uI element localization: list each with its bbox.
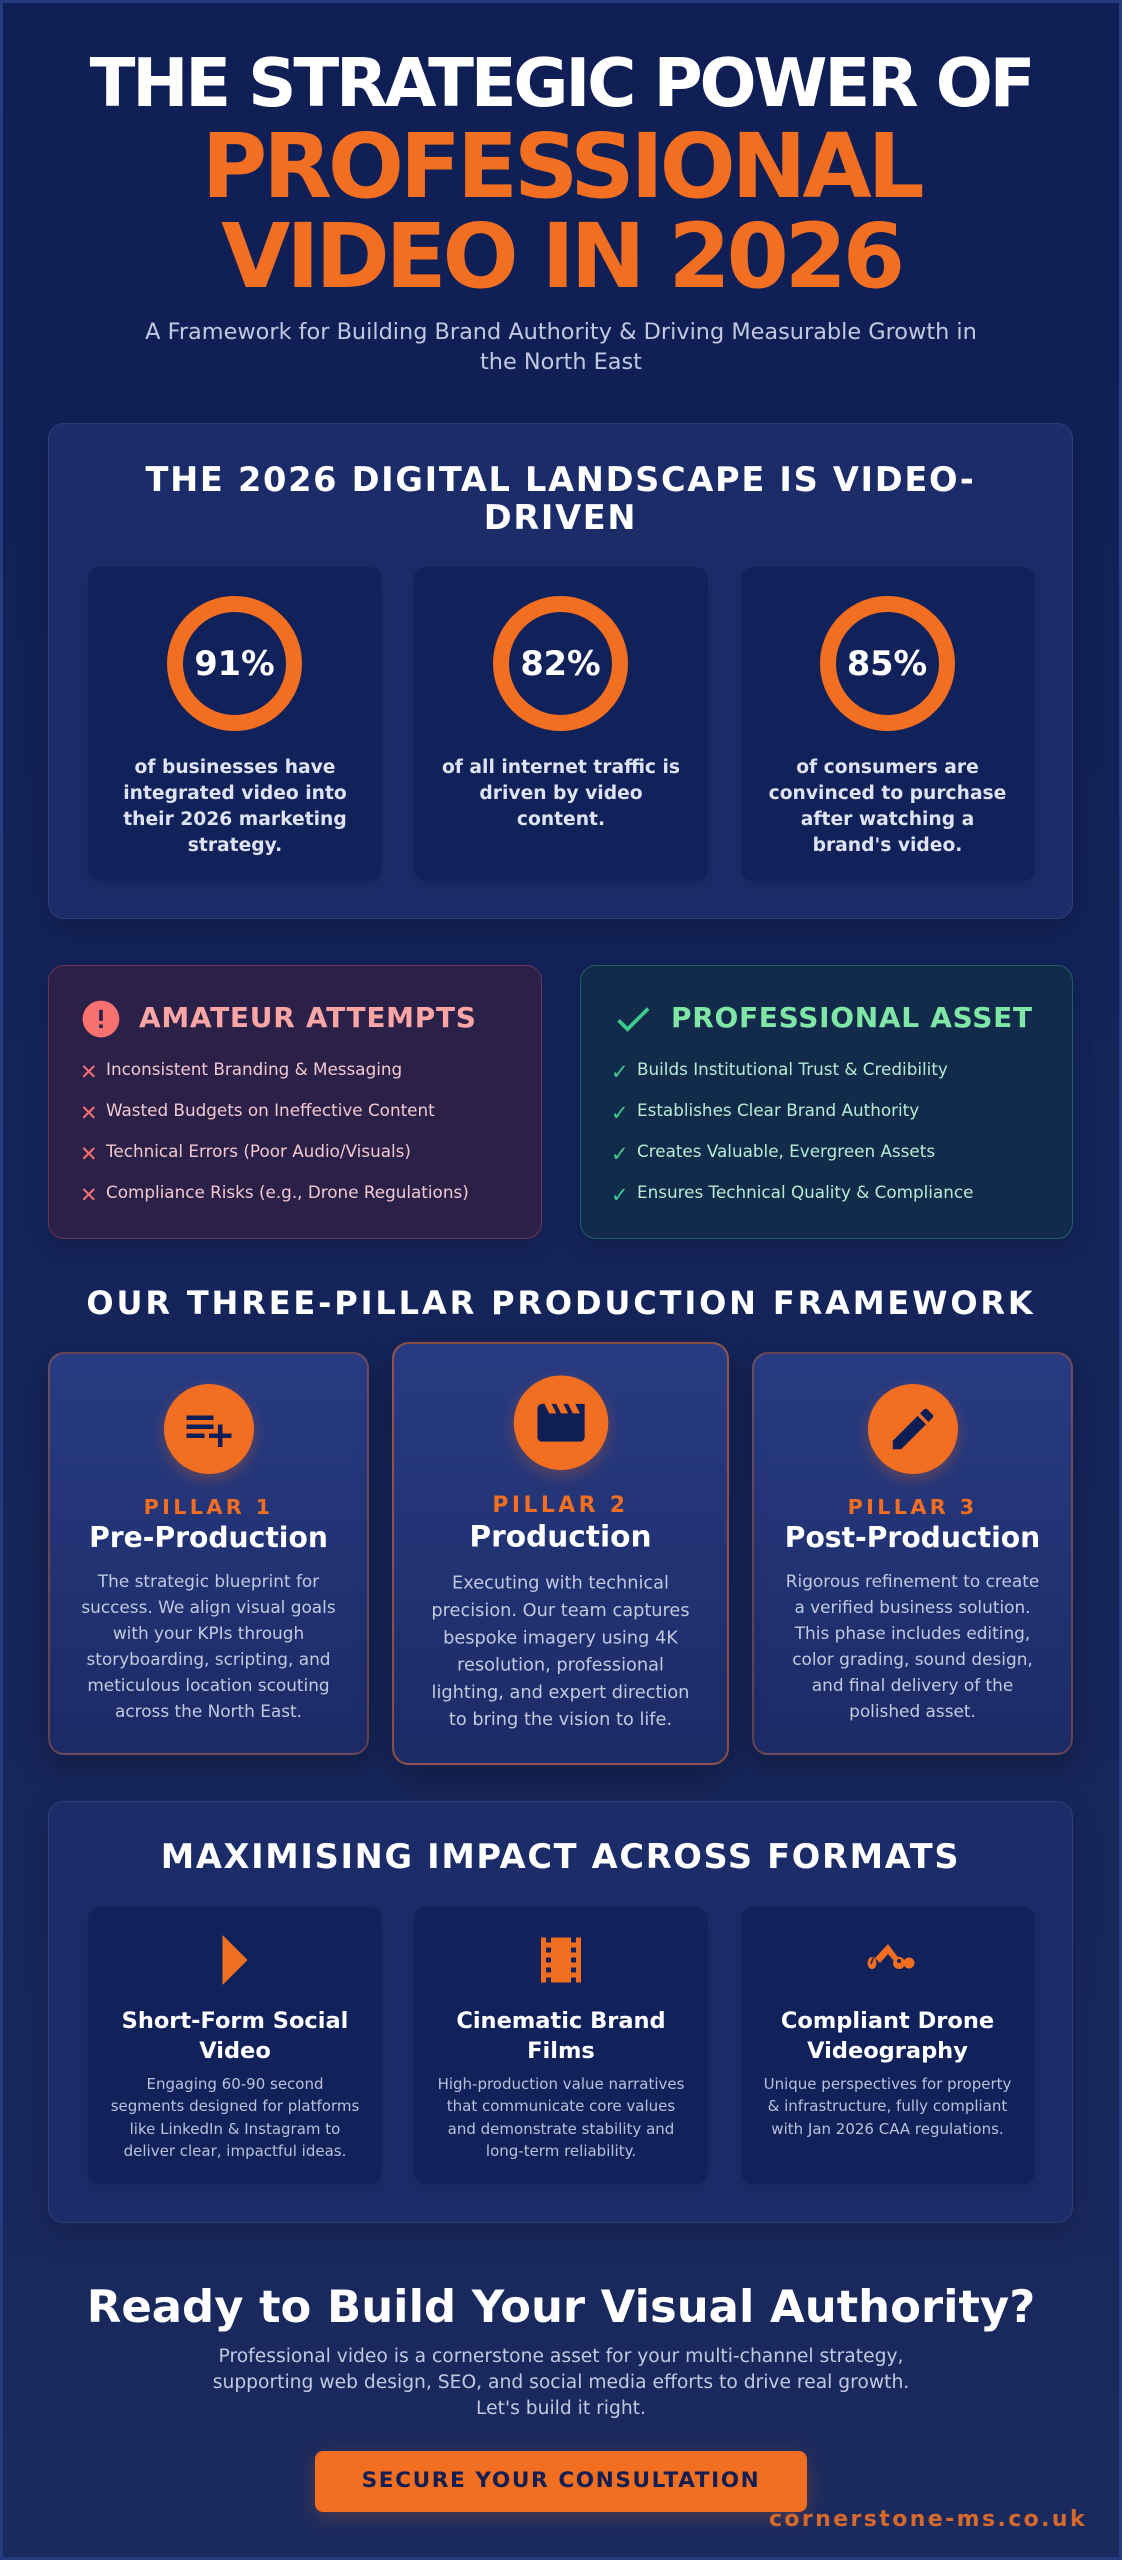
icon: play <box>222 1935 248 1985</box>
icon: playlist add <box>164 1384 254 1474</box>
list item <box>611 1140 935 1166</box>
pillar description: Rigorous refinement to create <box>786 1571 1039 1591</box>
panel: amateur attempts: Wasted Budgets on Ineffective Content <box>106 1100 435 1120</box>
stat ring 82% <box>493 596 628 731</box>
list item <box>80 1058 402 1084</box>
subtitle: the North East <box>480 349 642 375</box>
title highlight: VIDEO IN 2026 <box>221 205 901 309</box>
pillar description: color grading, sound design, <box>792 1649 1033 1669</box>
format description: like LinkedIn & Instagram to <box>130 2120 340 2138</box>
panel: amateur attempts <box>48 965 542 1239</box>
format description: that communicate core values <box>447 2097 675 2115</box>
icon: pencil <box>868 1384 958 1474</box>
pillar description: and final delivery of the <box>812 1675 1013 1695</box>
heading: framework: OUR THREE-PILLAR PRODUCTION FRAMEWORK <box>86 1284 1036 1322</box>
format description <box>438 2075 684 2160</box>
pillar 2 card <box>392 1342 729 1765</box>
pillar description: across the North East. <box>115 1701 302 1721</box>
heading: digital landscape <box>146 460 975 537</box>
pillar description: meticulous location scouting <box>87 1675 330 1695</box>
pillar description: bespoke imagery using 4K <box>443 1626 678 1647</box>
format description <box>764 2075 1011 2138</box>
pillar description: to bring the vision to life. <box>449 1708 672 1729</box>
panel: amateur attempts: ✕ <box>80 1100 98 1124</box>
title: THE STRATEGIC POWER OF <box>90 44 1032 122</box>
format description: with Jan 2026 CAA regulations. <box>771 2120 1004 2138</box>
pillar description: This phase includes editing, <box>795 1623 1030 1643</box>
format title <box>456 2008 666 2064</box>
pillar description: storyboarding, scripting, and <box>86 1649 331 1669</box>
cta button: SECURE YOUR CONSULTATION <box>362 2468 760 2493</box>
panel: amateur attempts: ✕ <box>80 1142 98 1166</box>
format description: & infrastructure, fully compliant <box>768 2097 1007 2115</box>
cta button <box>315 2451 807 2512</box>
panel: professional asset: ✓ <box>611 1142 629 1166</box>
format description: segments designed for platforms <box>111 2097 359 2115</box>
panel: professional asset: Ensures Technical Quality & Compliance <box>637 1182 973 1202</box>
format description: long-term reliability. <box>486 2142 636 2160</box>
stat text: driven by video <box>479 783 643 804</box>
format card: drone <box>740 1907 1034 2184</box>
stat text <box>123 757 347 856</box>
panel: amateur attempts: ✕ <box>80 1060 98 1084</box>
pillar 1 card <box>48 1352 369 1755</box>
format title: Films <box>527 2038 595 2064</box>
stat ring 85%: 85% <box>847 644 927 683</box>
panel: professional asset: ✓ <box>611 1182 629 1206</box>
pillar description: The strategic blueprint for <box>98 1571 319 1591</box>
pillar name: Post-Production <box>785 1521 1040 1554</box>
stat card: 91% <box>88 567 382 881</box>
pillar description <box>786 1571 1039 1721</box>
pillar description: with your KPIs through <box>113 1623 304 1643</box>
format description <box>111 2075 359 2160</box>
pillar description <box>81 1571 336 1721</box>
stat text: of all internet traffic is <box>442 757 680 778</box>
panel: digital landscape <box>48 423 1073 919</box>
pillar name: Production <box>469 1519 652 1554</box>
subtitle: A Framework for Building Brand Authority & Driving Measurable Growth in <box>145 319 977 345</box>
panel: amateur attempts: ✕ <box>80 1182 98 1206</box>
panel: professional asset: Builds Institutional Trust & Credibility <box>637 1058 948 1078</box>
stat text: of businesses have <box>134 757 335 778</box>
format title: Videography <box>807 2038 968 2064</box>
stat card: 82% <box>414 567 708 881</box>
subtitle <box>145 319 977 375</box>
panel: professional asset: ✓ <box>611 1060 629 1084</box>
stat text: integrated video into <box>123 783 347 804</box>
footer url: cornerstone-ms.co.uk <box>769 2507 1087 2532</box>
stat text: content. <box>517 809 605 830</box>
icon: clapperboard <box>513 1376 608 1470</box>
stat text: their 2026 marketing <box>123 809 347 830</box>
pillar 3 card <box>752 1352 1073 1755</box>
cta text: supporting web design, SEO, and social media efforts to drive real growth. <box>213 2372 909 2393</box>
stat ring 85% <box>820 596 954 731</box>
pillar description <box>431 1572 690 1729</box>
stat card: 85% <box>740 567 1034 881</box>
panel: professional asset: Establishes Clear Brand Authority <box>637 1100 919 1120</box>
panel: formats <box>48 1801 1073 2223</box>
stat ring 82%: 82% <box>520 644 601 683</box>
format description: and demonstrate stability and <box>448 2120 674 2138</box>
pillar description: lighting, and expert direction <box>432 1681 689 1702</box>
pillar description: a verified business solution. <box>794 1597 1031 1617</box>
heading: digital landscape: DRIVEN <box>484 498 637 537</box>
cta heading: Ready to Build Your Visual Authority? <box>87 2280 1035 2333</box>
pillar description: polished asset. <box>849 1701 976 1721</box>
format description: deliver clear, impactful ideas. <box>124 2142 346 2160</box>
icon: film strip <box>541 1938 581 1982</box>
format title: Video <box>199 2038 271 2064</box>
pillar name: Pre-Production <box>89 1521 328 1554</box>
heading: amateur attempts: AMATEUR ATTEMPTS <box>139 1001 477 1034</box>
format card: cinematic <box>414 1907 708 2184</box>
format description: Unique perspectives for property <box>764 2075 1011 2093</box>
cta text <box>213 2346 909 2419</box>
stat ring 91% <box>167 596 302 731</box>
panel: amateur attempts: Inconsistent Branding & Messaging <box>106 1058 402 1078</box>
icon: drone <box>868 1944 914 1969</box>
pillar label: PILLAR 2 <box>492 1492 629 1517</box>
format description: High-production value narratives <box>438 2075 684 2093</box>
format title: Cinematic Brand <box>456 2008 666 2034</box>
pillar description: success. We align visual goals <box>81 1597 336 1617</box>
stat text: brand's video. <box>813 835 962 856</box>
panel: amateur attempts: Technical Errors (Poor Audio/Visuals) <box>106 1140 411 1160</box>
list item <box>80 1140 411 1166</box>
pillar description: precision. Our team captures <box>431 1599 690 1620</box>
stat text: of consumers are <box>796 757 979 778</box>
panel: professional asset <box>580 965 1073 1239</box>
pillar label: PILLAR 3 <box>848 1495 977 1519</box>
cta text: Let's build it right. <box>476 2398 646 2419</box>
panel: professional asset: ✓ <box>611 1100 629 1124</box>
format card: short-form <box>88 1907 382 2184</box>
panel: amateur attempts: Compliance Risks (e.g., Drone Regulations) <box>106 1182 469 1202</box>
pillar description: Executing with technical <box>452 1572 669 1593</box>
list item <box>80 1100 435 1124</box>
stat text <box>769 757 1006 856</box>
pillar description: resolution, professional <box>457 1654 664 1675</box>
format title: Compliant Drone <box>781 2008 994 2034</box>
stat text: convinced to purchase <box>769 783 1006 804</box>
cta text: Professional video is a cornerstone asset for your multi-channel strategy, <box>219 2346 903 2367</box>
heading: professional asset: PROFESSIONAL ASSET <box>671 1001 1033 1034</box>
list item <box>80 1182 469 1206</box>
stat text <box>442 757 680 830</box>
stat text: after watching a <box>801 809 974 830</box>
format title <box>781 2008 994 2064</box>
stat ring 91%: 91% <box>194 644 275 683</box>
title highlight: PROFESSIONAL <box>202 115 920 219</box>
format title: Short-Form Social <box>122 2008 348 2034</box>
heading: digital landscape: THE 2026 DIGITAL LANDSCAPE IS VIDEO- <box>146 460 975 499</box>
title highlight <box>202 115 922 309</box>
list item <box>611 1058 948 1084</box>
icon: warning circle <box>82 1000 120 1038</box>
stat text: strategy. <box>188 835 282 856</box>
pillar label: PILLAR 1 <box>144 1495 273 1519</box>
format title <box>122 2008 348 2064</box>
list item <box>611 1100 919 1124</box>
panel: professional asset: Creates Valuable, Evergreen Assets <box>637 1140 935 1160</box>
list item <box>611 1182 973 1206</box>
heading: formats: MAXIMISING IMPACT ACROSS FORMATS <box>161 1837 960 1876</box>
icon: check <box>617 1007 650 1032</box>
format description: Engaging 60-90 second <box>146 2075 324 2093</box>
